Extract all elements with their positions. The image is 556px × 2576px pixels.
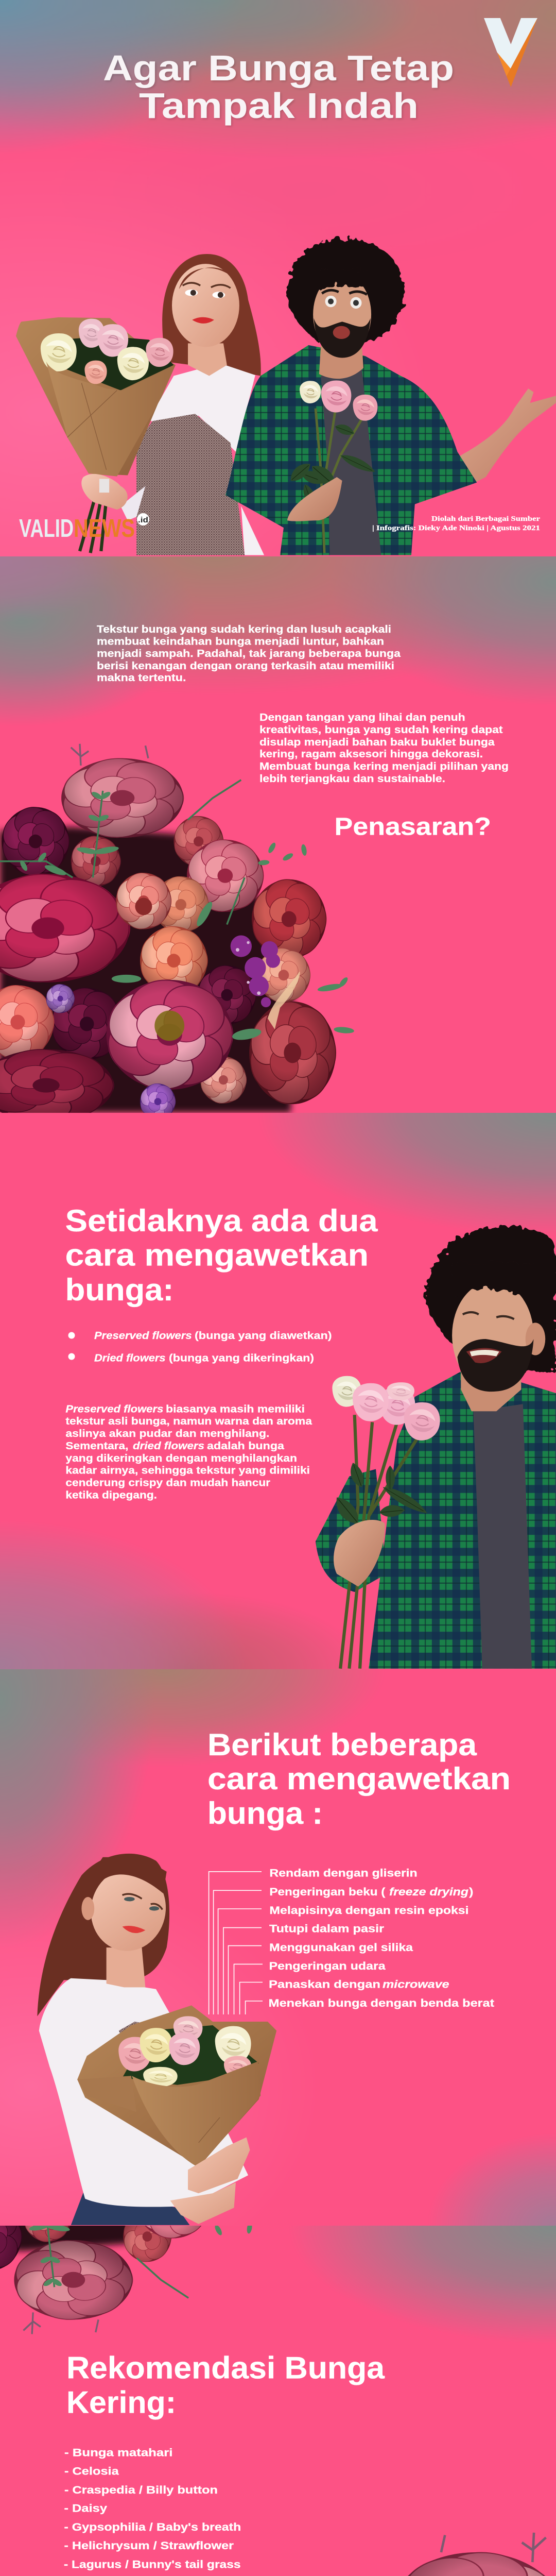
ways background gradient: [0, 1669, 556, 2226]
bullet list: [68, 1330, 332, 1364]
title: Agar Bunga Tetap: [103, 48, 454, 88]
illustration: flower corner top left: [0, 1953, 299, 2334]
paragraph: dried flower texture: Tekstur bunga yang sudah kering dan lusuh acapkali: [97, 624, 391, 635]
heading: recommendations: Kering:: [66, 2385, 176, 2419]
illustration: woman with bouquet and man with roses: [16, 239, 556, 555]
paragraph: creativity: Membuat bunga kering menjadi pilihan yang: [259, 761, 509, 772]
list of dried flowers: - Gypsophilia / Baby's breath: [64, 2521, 241, 2533]
paragraph: preserved vs dried: aslinya akan pudar dan menghilang.: [65, 1428, 269, 1439]
heading: several ways: bunga :: [207, 1796, 323, 1831]
paragraph: preserved vs dried: dried flowers: [133, 1440, 204, 1452]
bracket connector lines: [209, 1872, 263, 2014]
panel: cover: [16, 18, 556, 555]
panel: two preservation methods: [65, 1204, 556, 1669]
heading: Penasaran?: Penasaran?: [335, 813, 491, 841]
heading: at least two ways: cara mengawetkan: [65, 1238, 369, 1273]
heading: at least two ways: [65, 1204, 378, 1307]
paragraph: dried flower texture: [97, 624, 401, 684]
list of preservation methods: freeze drying: [389, 1886, 468, 1898]
logo: VALIDNEWS.id: [19, 513, 149, 537]
roses in hand: [331, 1376, 440, 1669]
list of preservation methods: microwave: [383, 1979, 449, 1991]
heading: several ways: cara mengawetkan: [207, 1761, 511, 1796]
list of preservation methods: Rendam dengan gliserin: [269, 1868, 418, 1879]
list of preservation methods: Melapisinya dengan resin epoksi: [269, 1905, 468, 1917]
logo: VALIDNEWS.id: .id: [138, 516, 148, 524]
man's roses: [287, 381, 377, 553]
list of dried flowers: - Bunga matahari: [64, 2447, 172, 2459]
list of preservation methods: [269, 1868, 494, 2009]
list of preservation methods: Menekan bunga dengan benda berat: [269, 1997, 494, 2009]
list of dried flowers: - Lagurus / Bunny's tail grass: [64, 2558, 241, 2570]
paragraph: preserved vs dried: kadar airnya, sehingga tekstur yang dimiliki: [65, 1465, 310, 1477]
illustration: laughing man with roses: [316, 1227, 556, 1669]
heading: recommendations: [66, 2351, 385, 2419]
heading: at least two ways: Setidaknya ada dua: [65, 1204, 378, 1238]
bullet list: (bunga yang diawetkan): [195, 1330, 332, 1342]
logo: VALIDNEWS.id: NEWS: [74, 515, 135, 543]
paragraph: dried flower texture: berisi kenangan dengan orang terkasih atau memiliki: [97, 660, 394, 672]
bullet list: Preserved flowers: [94, 1330, 192, 1342]
paragraph: creativity: disulap menjadi bahan baku buklet bunga: [259, 737, 495, 748]
paragraph: creativity: kreativitas, bunga yang sudah kering dapat: [259, 724, 503, 736]
woman's hair back: [37, 1854, 169, 2016]
paragraph: preserved vs dried: tekstur asli bunga, namun warna dan aroma: [65, 1416, 312, 1427]
list of dried flowers: [64, 2447, 241, 2576]
paragraph: dried flower texture: menjadi sampah. Padahal, tak jarang beberapa bunga: [97, 648, 401, 659]
list of preservation methods: Tutupi dalam pasir: [269, 1923, 384, 1935]
paragraph: preserved vs dried: Preserved flowers: [65, 1403, 163, 1415]
illustration: flower corner bottom right: [162, 2533, 556, 2576]
heading: at least two ways: bunga:: [65, 1273, 174, 1307]
woman's head: [81, 1857, 175, 1987]
panel: ways to preserve: [37, 1727, 511, 2225]
list of preservation methods: Pengeringan beku (: [269, 1886, 385, 1898]
man: [225, 239, 556, 555]
paragraph: dried flower texture: membuat keindahan bunga menjadi luntur, bahkan: [97, 636, 384, 647]
source credit: Diolah dari Berbagai Sumber: [431, 515, 540, 522]
paragraph: preserved vs dried: adalah bunga: [207, 1440, 285, 1452]
paragraph: dried flower texture: makna tertentu.: [97, 672, 186, 684]
paragraph: preserved vs dried: biasanya masih memiliki: [166, 1403, 305, 1415]
cover background gradient: [0, 0, 556, 556]
heading: several ways: Berikut beberapa: [207, 1727, 477, 1762]
icon: V logo: [484, 18, 537, 87]
list of preservation methods: ): [469, 1886, 473, 1898]
paragraph: preserved vs dried: cenderung crispy dan mudah hancur: [65, 1478, 270, 1489]
paragraph: preserved vs dried: [65, 1403, 312, 1501]
man's head: [425, 1227, 556, 1392]
list of dried flowers: - Craspedia / Billy button: [64, 2484, 218, 2496]
list of dried flowers: - Daisy: [64, 2503, 107, 2515]
bouquet: [77, 2005, 276, 2167]
paragraph: creativity: kering, ragam aksesori hingga dekorasi.: [259, 749, 483, 760]
list of preservation methods: Pengeringan udara: [269, 1960, 386, 1972]
woman's hands: [170, 2137, 250, 2224]
logo: VALIDNEWS.id: VALID: [19, 515, 74, 543]
illustration: flower bouquet: [0, 744, 354, 1125]
panel: intro: [0, 624, 509, 1125]
panel: recommendations: [0, 1953, 556, 2576]
paragraph: preserved vs dried: ketika dipegang.: [65, 1489, 157, 1501]
paragraph: creativity: [259, 712, 509, 785]
list of dried flowers: - Helichrysum / Strawflower: [64, 2540, 234, 2552]
paragraph: preserved vs dried: Sementara,: [65, 1440, 128, 1452]
title: [103, 48, 454, 126]
bouquet held by woman: [16, 317, 176, 553]
heading: several ways: [207, 1727, 511, 1831]
list of dried flowers: - Celosia: [64, 2465, 119, 2477]
bullet list: (bunga yang dikeringkan): [169, 1353, 314, 1364]
paragraph: creativity: lebih terjangkau dan sustainable.: [259, 773, 445, 785]
source credit: | Infografis: Dieky Ade Ninoki | Agustus 2021: [372, 524, 540, 532]
source credit: [372, 515, 540, 532]
bullet list: Dried flowers: [94, 1353, 166, 1364]
list of preservation methods: Menggunakan gel silika: [269, 1942, 413, 1954]
woman's body: [39, 1978, 248, 2225]
intro background gradient: [0, 556, 556, 1113]
man's shirt and body: [316, 1357, 556, 1669]
heading: recommendations: Rekomendasi Bunga: [66, 2351, 385, 2385]
paragraph: creativity: Dengan tangan yang lihai dan penuh: [259, 712, 465, 723]
woman: [120, 254, 264, 555]
list of preservation methods: Panaskan dengan: [269, 1979, 380, 1991]
paragraph: preserved vs dried: yang dikeringkan dengan menghilangkan: [65, 1453, 297, 1464]
title: Tampak Indah: [139, 86, 419, 126]
methods background gradient: [0, 1113, 556, 1669]
recommendations background gradient: [0, 2226, 556, 2576]
illustration: woman holding bouquet: [37, 1854, 276, 2225]
